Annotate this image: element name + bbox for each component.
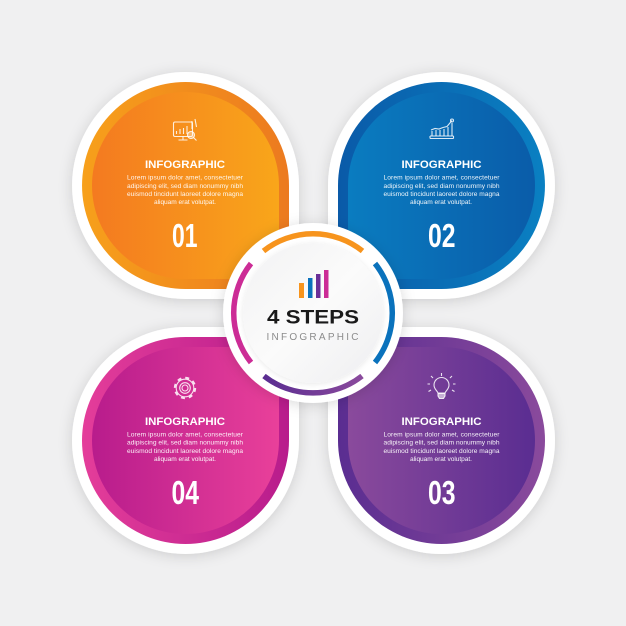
- body text 03: [384, 431, 500, 463]
- body text 02: aliquam erat volutpat.: [410, 199, 472, 206]
- arc: magenta: [234, 264, 251, 362]
- body text 01: aliquam erat volutpat.: [154, 199, 216, 206]
- body text 03: aliquam erat volutpat.: [410, 456, 472, 463]
- heading 03: INFOGRAPHIC: [402, 416, 482, 428]
- body text 03: euismod tincidunt laoreet dolore magna: [384, 448, 500, 455]
- centre badge: [223, 223, 403, 403]
- panel 01 inner face: [92, 92, 279, 279]
- heading 02: INFOGRAPHIC: [402, 159, 482, 171]
- centre subtitle: INFOGRAPHIC: [266, 332, 358, 343]
- body text 03: adipiscing elit, sed diam nonummy nibh: [384, 440, 500, 446]
- body text 01: adipiscing elit, sed diam nonummy nibh: [127, 183, 243, 190]
- icon: gear: [175, 378, 195, 398]
- body text 03: Lorem ipsum dolor amet, consectetuer: [384, 431, 500, 438]
- centre white ring: [223, 223, 403, 403]
- panel: step 04: [72, 327, 299, 554]
- panel 02 inner face: [348, 92, 535, 279]
- icon: monitor with chart and magnifier: [174, 119, 196, 140]
- panel 04 outer band: [82, 337, 289, 544]
- icon: light bulb: [428, 373, 456, 398]
- body text 02: [384, 174, 500, 206]
- heading 04: INFOGRAPHIC: [145, 416, 225, 428]
- body text 04: [127, 431, 244, 463]
- panel 02 outer band: [338, 82, 545, 289]
- body text 01: euismod tincidunt laoreet dolore magna: [127, 191, 243, 198]
- body text 04: aliquam erat volutpat.: [154, 456, 216, 463]
- panel: step 02: [328, 72, 555, 299]
- panel 03 white backing: [328, 327, 555, 554]
- number 03: 03: [428, 474, 456, 511]
- body text 01: Lorem ipsum dolor amet, consectetuer: [127, 174, 244, 182]
- centre title: 4 STEPS: [267, 308, 359, 328]
- number 02: 02: [428, 217, 456, 254]
- icon: growth bar chart: [430, 119, 454, 138]
- panel 02 white backing: [328, 72, 555, 299]
- centre disk: [243, 243, 383, 383]
- body text 01: [127, 174, 244, 206]
- arc: purple: [264, 376, 362, 393]
- panel 04 white backing: [72, 327, 299, 554]
- panel: step 03: [328, 327, 555, 554]
- heading 01: INFOGRAPHIC: [145, 159, 225, 171]
- arc: blue: [375, 264, 392, 362]
- body text 04: Lorem ipsum dolor amet, consectetuer: [127, 431, 244, 438]
- panel: step 01: [72, 72, 299, 299]
- arc: orange: [264, 234, 362, 251]
- panel 01 white backing: [72, 72, 299, 299]
- number 04: 04: [172, 474, 199, 511]
- body text 04: adipiscing elit, sed diam nonummy nibh: [127, 440, 243, 446]
- panel 04 inner face: [92, 347, 279, 534]
- panel 03 inner face: [348, 347, 535, 534]
- panel 03 outer band: [338, 337, 545, 544]
- number 01: 01: [172, 217, 198, 254]
- panel 01 outer band: [82, 82, 289, 289]
- body text 02: Lorem ipsum dolor amet, consectetuer: [384, 174, 500, 182]
- body text 02: euismod tincidunt laoreet dolore magna: [384, 191, 500, 198]
- body text 04: euismod tincidunt laoreet dolore magna: [127, 448, 243, 455]
- icon: bar chart: [299, 270, 328, 298]
- body text 02: adipiscing elit, sed diam nonummy nibh: [384, 183, 500, 190]
